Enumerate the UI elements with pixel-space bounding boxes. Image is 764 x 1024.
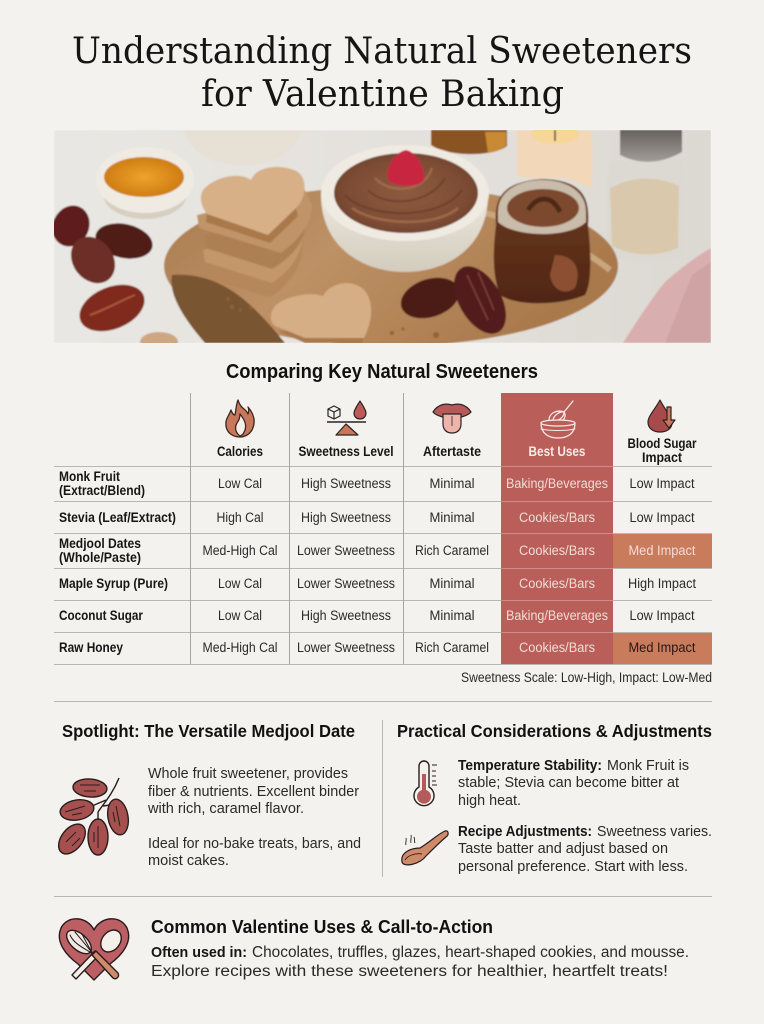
row: Stevia: Minimal (430, 510, 474, 525)
row: Maple Syrup: Cookies/Bars (519, 576, 595, 591)
row: Coconut Sugar: Baking/Beverages (506, 608, 608, 623)
row: Medjool Dates: Lower Sweetness (297, 543, 395, 558)
panel: practical considerations (397, 721, 712, 875)
row: Raw Honey: Med Impact (628, 640, 696, 655)
row: Coconut Sugar: High Sweetness (301, 608, 391, 623)
panel: common Valentine uses and call to action (59, 916, 689, 980)
panel: spotlight on Medjool dates (53, 721, 361, 869)
row: Stevia: High Cal (216, 510, 264, 525)
row: Raw Honey: Cookies/Bars (519, 640, 595, 655)
spotlight text (147, 766, 361, 869)
spotlight text: Ideal for no-bake treats, bars, and (148, 836, 361, 852)
dates on the board (400, 277, 458, 319)
icon: heart with whisk and spoon (59, 919, 129, 980)
row: Maple Syrup (59, 576, 696, 591)
icon: wooden spoon (402, 831, 448, 865)
temperature text: stable; Stevia can become bitter at (458, 775, 679, 791)
candle (517, 130, 592, 188)
highlighted Best Uses column (501, 393, 613, 664)
column headers: Sweetness Level (298, 444, 394, 459)
row: Raw Honey: Rich Caramel (415, 640, 489, 655)
row: Stevia: High Sweetness (301, 510, 391, 525)
row: Monk Fruit: Low Impact (630, 476, 695, 491)
row: Medjool Dates: Cookies/Bars (519, 543, 595, 558)
call-to-action text: Chocolates, truffles, glazes, heart-shaped cookies, and mousse. (252, 944, 689, 961)
row: Maple Syrup: High Impact (628, 576, 696, 591)
spotlight heading: Spotlight: The Versatile Medjool Date (62, 721, 355, 741)
call-to-action text: Often used in: (151, 944, 247, 961)
row: Coconut Sugar: Minimal (430, 608, 474, 623)
row: Monk Fruit: High Sweetness (301, 476, 391, 491)
table footnote: Sweetness Scale: Low-High, Impact: Low-Med (461, 670, 712, 685)
honey bowl (104, 198, 186, 220)
napkin (623, 248, 711, 343)
row: Coconut Sugar: Low Impact (630, 608, 695, 623)
row: Monk Fruit: Minimal (430, 476, 474, 491)
icon: lips and tongue (433, 404, 471, 433)
top cookie (206, 208, 298, 243)
medium impact cell (613, 632, 712, 664)
row: Coconut Sugar: Coconut Sugar (59, 608, 144, 623)
recipe text: Taste batter and adjust based on (458, 841, 668, 857)
spotlight text: fiber & nutrients. Excellent binder (148, 784, 359, 800)
icon: blood drop with down arrow (648, 400, 675, 432)
spotlight text: Whole fruit sweetener, provides (148, 766, 348, 782)
row: Raw Honey: Med-High Cal (202, 640, 278, 655)
title: for Valentine Baking (201, 74, 564, 115)
temperature text: high heat. (458, 793, 521, 809)
big chocolate bowl (321, 195, 488, 272)
icon: sugar cube, drop and balance scale (327, 401, 366, 435)
recipe text (458, 824, 712, 875)
column headers: Impact (642, 450, 682, 465)
call-to-action heading: Common Valentine Uses & Call-to-Action (151, 916, 493, 937)
row: Medjool Dates: Med-High Cal (202, 543, 278, 558)
icon: whisk and bowl (541, 401, 575, 438)
icon: flame (226, 400, 254, 437)
row: Stevia: Low Impact (630, 510, 695, 525)
practical heading: Practical Considerations & Adjustments (397, 721, 712, 741)
row: Medjool Dates: Med Impact (628, 543, 696, 558)
column headers (217, 436, 697, 465)
spotlight text: with rich, caramel flavor. (147, 801, 304, 817)
temperature text (458, 758, 689, 809)
cookie stack (252, 251, 301, 296)
icon: date branch (53, 778, 131, 859)
shaker (607, 160, 685, 262)
bottom cookie (278, 330, 366, 343)
row: Medjool Dates: (Whole/Paste) (59, 550, 141, 565)
temperature text: Temperature Stability: (458, 758, 602, 774)
row: Stevia: Cookies/Bars (519, 510, 595, 525)
syrup bottle (431, 130, 507, 154)
row: Monk Fruit: (Extract/Blend) (59, 483, 145, 498)
row: Coconut Sugar (59, 608, 695, 623)
column headers: Calories (217, 444, 263, 459)
row: Coconut Sugar: Low Cal (218, 608, 262, 623)
row: Raw Honey (59, 640, 696, 655)
jar of date paste (494, 179, 590, 303)
call-to-action text: Explore recipes with these sweeteners for healthier, heartfelt treats! (151, 963, 668, 980)
temperature text: Monk Fruit is (607, 758, 689, 774)
row: Monk Fruit: Monk Fruit (59, 469, 120, 484)
row: Monk Fruit: Baking/Beverages (506, 476, 608, 491)
column headers: Aftertaste (423, 444, 481, 459)
recipe text: Sweetness varies. (597, 824, 712, 840)
raspberry (387, 150, 424, 186)
column headers: Blood Sugar (628, 436, 697, 451)
row: Stevia: Stevia (Leaf/Extract) (59, 510, 176, 525)
spotlight text: moist cakes. (148, 853, 229, 869)
row: Monk Fruit: Low Cal (218, 476, 262, 491)
recipe text: personal preference. Start with less. (458, 859, 688, 875)
row: Maple Syrup: Lower Sweetness (297, 576, 395, 591)
title (72, 31, 692, 115)
column headers: Best Uses (528, 444, 586, 459)
comparison table (54, 393, 712, 664)
row: Raw Honey: Lower Sweetness (297, 640, 395, 655)
wooden board (164, 186, 618, 346)
hero photo: baked treats, bowls and dates (46, 124, 711, 352)
row: Stevia (59, 510, 695, 525)
row: Raw Honey: Raw Honey (59, 640, 123, 655)
dates on the table (54, 204, 90, 248)
icon: thermometer (414, 761, 437, 806)
row: Medjool Dates (59, 536, 696, 565)
small cookie (139, 331, 179, 343)
top bowl (184, 130, 301, 165)
row: Maple Syrup: Low Cal (218, 576, 262, 591)
recipe text: Recipe Adjustments: (458, 824, 592, 840)
row: Maple Syrup: Maple Syrup (Pure) (59, 576, 168, 591)
title: Understanding Natural Sweeteners (72, 31, 692, 72)
crumbs (226, 297, 439, 338)
call-to-action text (151, 944, 689, 980)
row: Maple Syrup: Minimal (430, 576, 474, 591)
section heading: comparison: Comparing Key Natural Sweeteners (226, 361, 538, 383)
row: Medjool Dates: Medjool Dates (59, 536, 141, 551)
row: Monk Fruit (59, 469, 695, 498)
row: Medjool Dates: Rich Caramel (415, 543, 489, 558)
medium impact cell (613, 533, 712, 568)
